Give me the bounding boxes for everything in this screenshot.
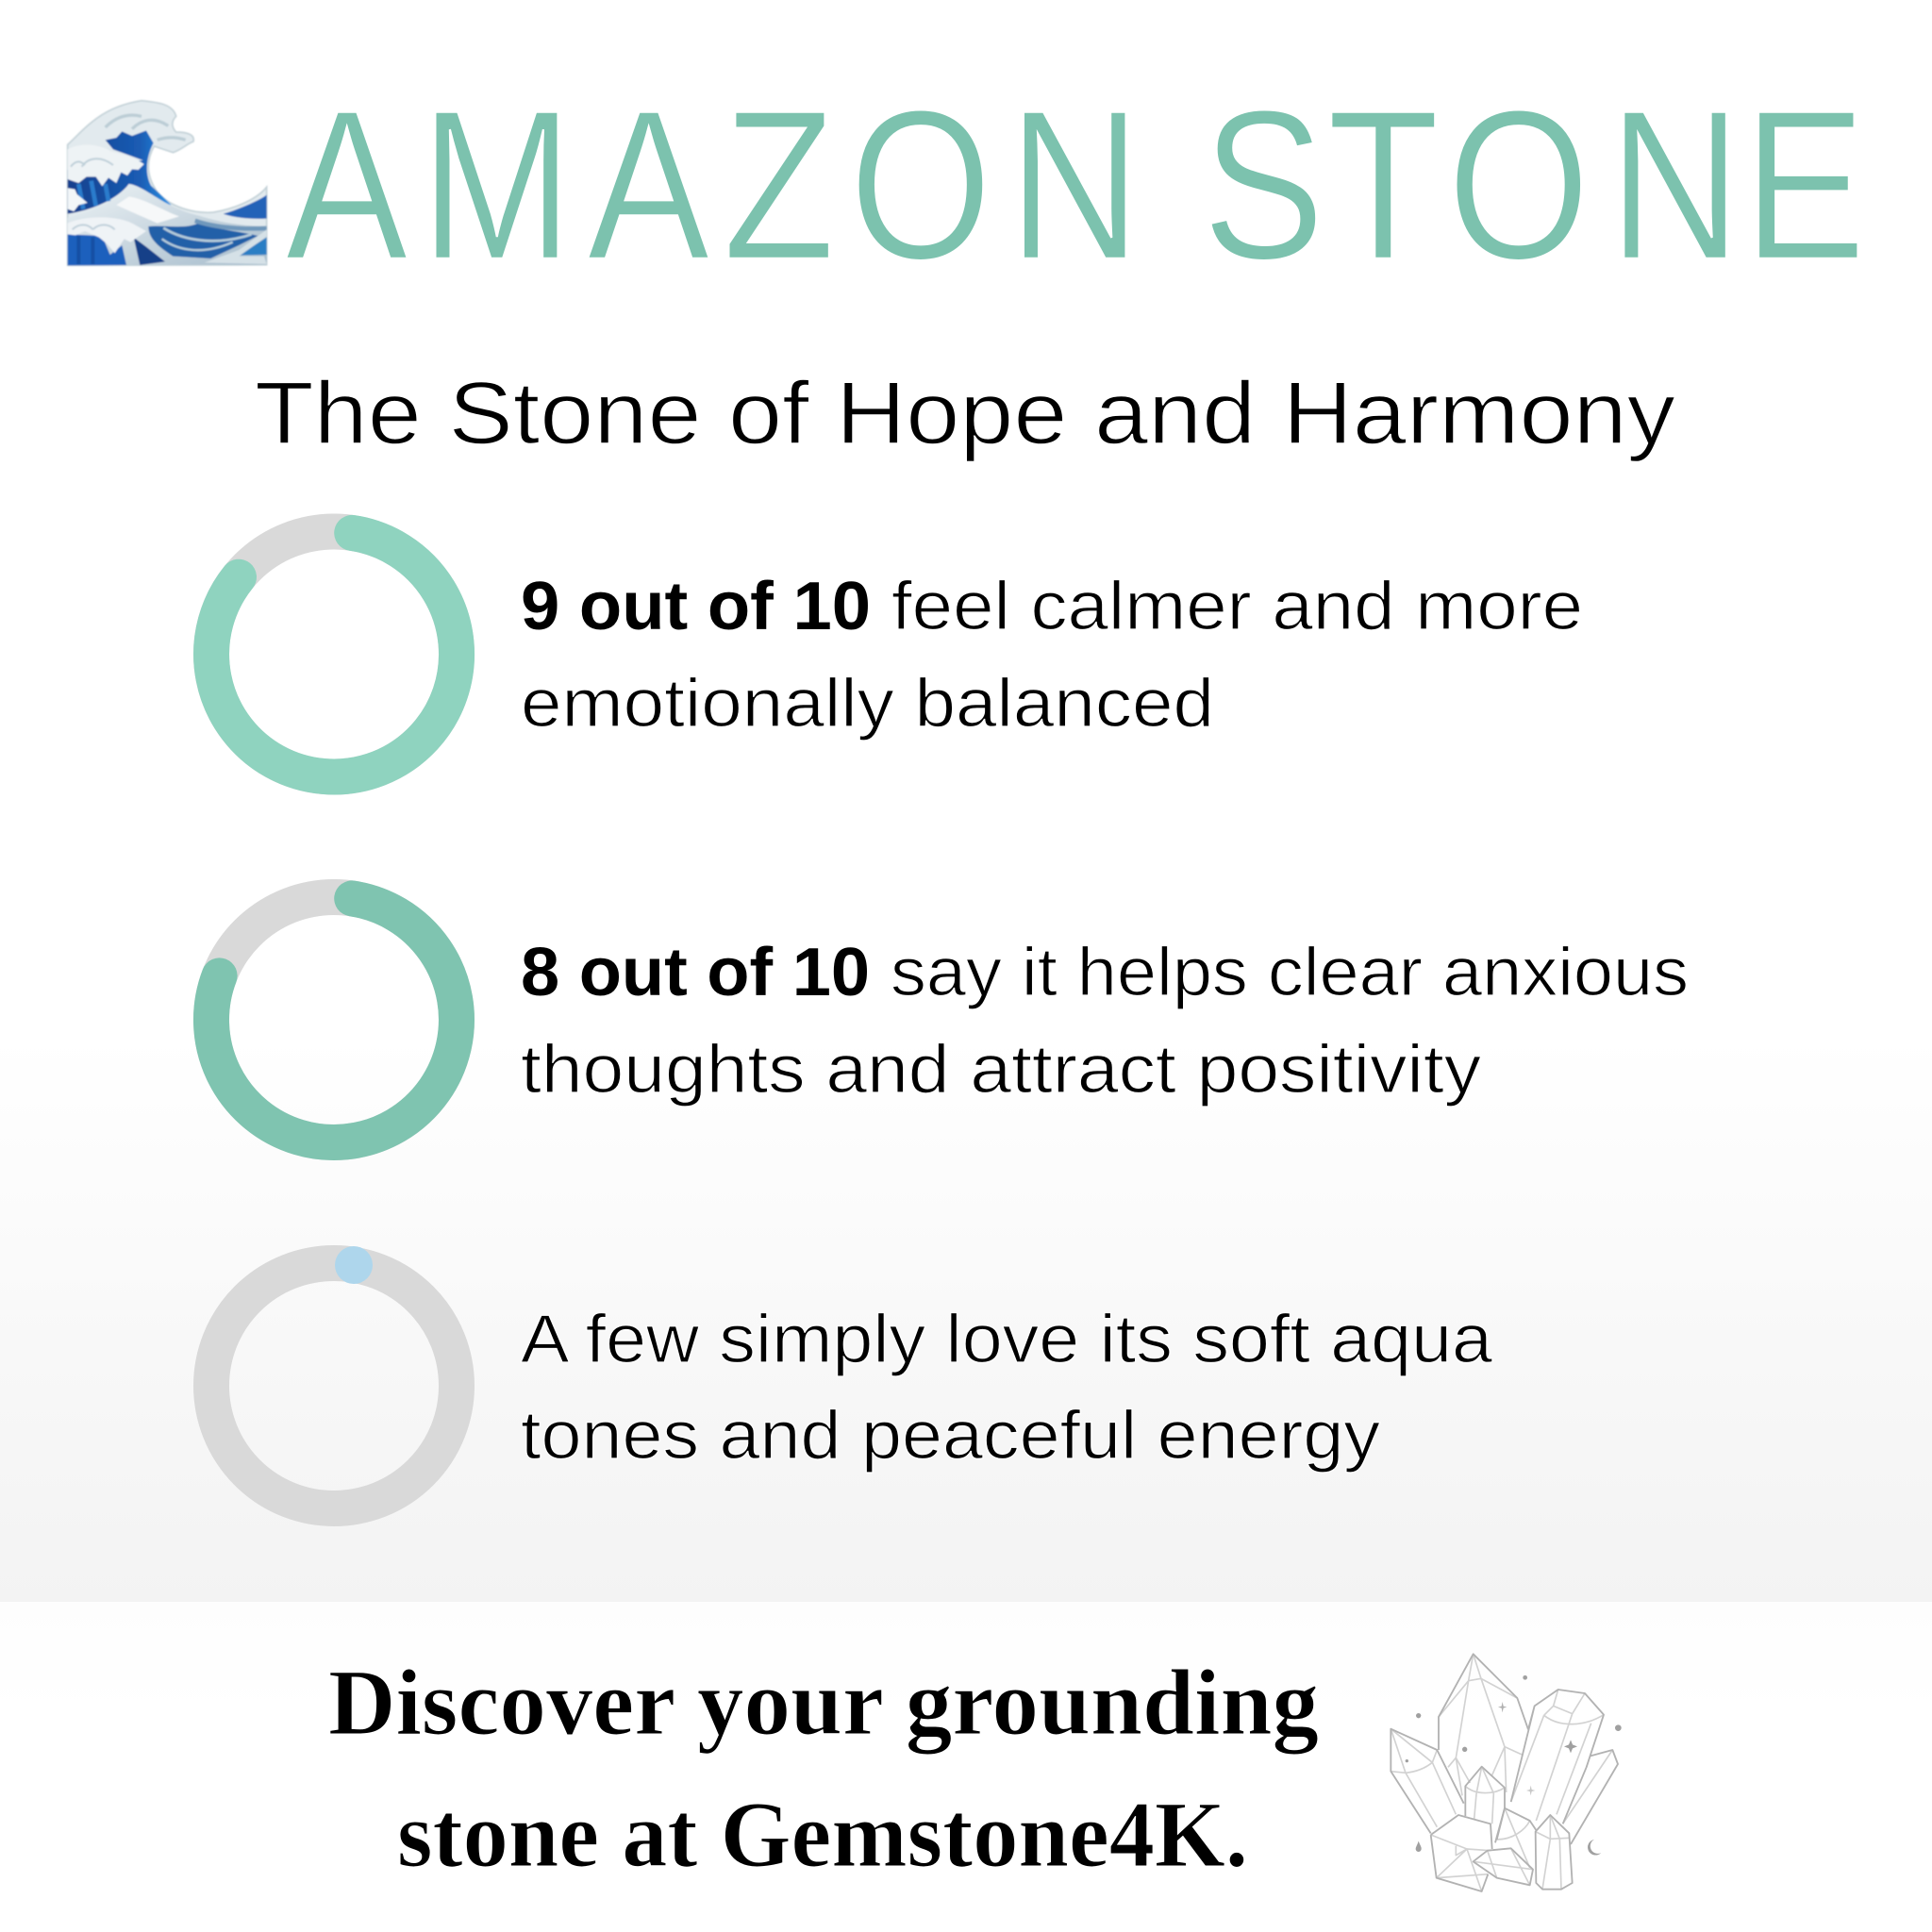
icon: great wave bbox=[68, 101, 267, 265]
stat 1: text: feel calmer and more bbox=[891, 569, 1583, 644]
stat 2: text: 8 out of 10 bbox=[521, 935, 870, 1010]
stat 1: text: 9 out of 10 bbox=[521, 569, 871, 644]
title: AMAZON STONE bbox=[286, 65, 1866, 304]
stat 2: text: thoughts and attract positivity bbox=[521, 1032, 1481, 1108]
stat 1: text bbox=[521, 569, 1583, 741]
subtitle: The Stone of Hope and Harmony bbox=[255, 363, 1675, 462]
stat 3: donut chart small share bbox=[211, 1246, 457, 1508]
call to action bbox=[328, 1650, 1319, 1887]
icon: crystal cluster bbox=[1391, 1654, 1622, 1891]
stat 3: text: tones and peaceful energy bbox=[521, 1398, 1380, 1474]
background gradient panel bbox=[0, 1038, 1932, 1715]
stat 1: text: emotionally balanced bbox=[521, 666, 1214, 741]
stat 1: donut chart 90 percent bbox=[211, 532, 457, 777]
call to action: stone at Gemstone4K. bbox=[397, 1782, 1248, 1887]
stat 2: text bbox=[521, 935, 1689, 1108]
stat 2: text: say it helps clear anxious bbox=[891, 935, 1689, 1010]
call to action: Discover your grounding bbox=[328, 1650, 1319, 1755]
stat 3: text: A few simply love its soft aqua bbox=[521, 1302, 1493, 1377]
stat 3: text bbox=[521, 1302, 1493, 1474]
stat 2: donut chart 80 percent bbox=[211, 897, 457, 1142]
